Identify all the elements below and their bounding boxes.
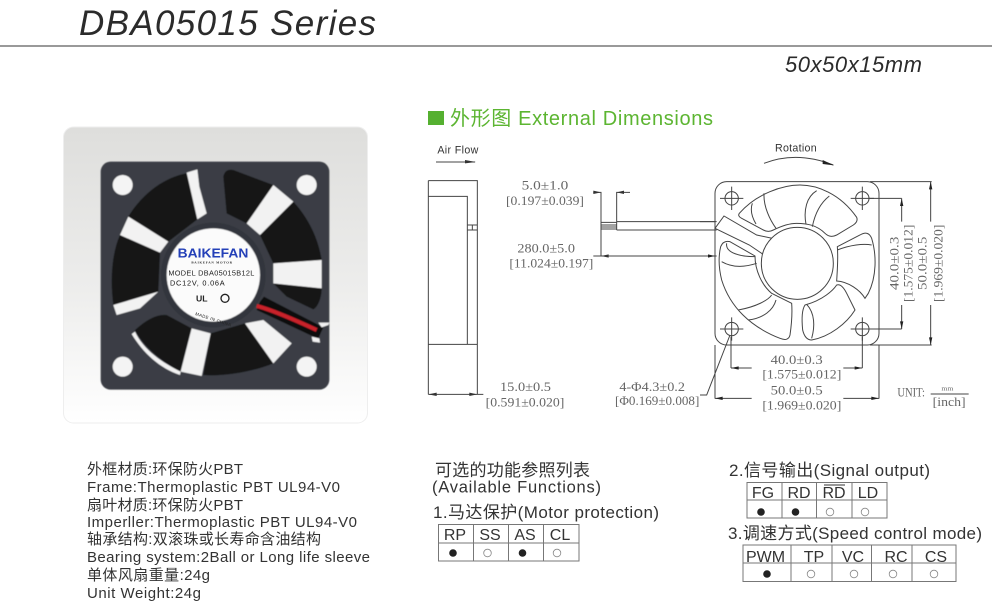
dimension lines [868, 182, 932, 345]
table: motor protection: RP [444, 527, 466, 544]
drawing: front view [700, 143, 969, 412]
unit legend: mm [941, 386, 954, 393]
size label: 50x50x15mm [785, 52, 922, 77]
drawing: front view: [1.575±0.012] [762, 368, 841, 382]
fan product image [101, 162, 329, 390]
rotated dimensions: 40.0±0.3 [887, 237, 901, 290]
drawing: side view and wire dimensions: 15.0±0.5 [500, 380, 551, 394]
specifications text block: Frame:Thermoplastic PBT UL94-V0 [87, 479, 340, 496]
specifications text block: 扇叶材质:环保防火PBT [87, 497, 243, 514]
unit legend: UNIT: [897, 386, 925, 400]
motor protection heading: 1.马达保护(Motor protection) [433, 503, 659, 522]
specifications text block: Bearing system:2Ball or Long life sleeve [87, 549, 370, 566]
speed control heading: 3.调速方式(Speed control mode) [728, 524, 982, 543]
table: motor protection [438, 524, 579, 561]
hub label: BAIKEFAN [178, 247, 248, 261]
hub label: UL [196, 294, 208, 304]
panel: fan photo [64, 127, 368, 423]
available functions heading: 可选的功能参照列表 [435, 461, 590, 480]
table: speed control [743, 545, 956, 582]
table: speed control: TP [804, 549, 824, 566]
drawing: side view and wire dimensions: 280.0±5.0 [517, 241, 575, 255]
air flow label: Air Flow [437, 144, 479, 156]
specifications text block: Unit Weight:24g [87, 585, 201, 602]
table: signal output: FG [752, 485, 774, 502]
hub label: BAIKEFAN MOTOR [191, 261, 233, 265]
dimension text: 5.0±1.0 [522, 178, 568, 192]
wire [601, 222, 717, 230]
table: signal output: RD [822, 485, 846, 502]
drawing: front view: 50.0±0.5 [916, 237, 930, 290]
title: DBA05015 Series [79, 4, 376, 43]
table: motor protection: CL [550, 527, 570, 544]
table: motor protection: AS [514, 527, 536, 544]
drawing: side view and wire dimensions: [0.591±0.020] [486, 396, 564, 410]
table: speed control: CS [925, 549, 947, 566]
table: speed control: RC [884, 549, 908, 566]
hub label: MODEL DBA05015B12L [168, 269, 254, 278]
hub label: DC12V, 0.06A [170, 279, 225, 288]
specifications text block: 外框材质:环保防火PBT [87, 461, 243, 478]
hub label [168, 247, 254, 328]
white gaps between blades [113, 169, 322, 376]
table: signal output: LD [858, 485, 878, 502]
drawing: front view: [1.575±0.012] [901, 225, 915, 302]
wires [257, 297, 329, 343]
fan hub [161, 223, 266, 327]
side view outline [428, 181, 477, 394]
drawing: front view: [1.969±0.020] [762, 398, 841, 412]
frame [715, 182, 879, 345]
specifications text block: 轴承结构:双滚珠或长寿命含油结构 [87, 530, 321, 548]
blade windows [739, 185, 857, 236]
specifications text block: 单体风扇重量:24g [87, 567, 210, 584]
wire holder [715, 216, 780, 261]
drawing: side view and wire dimensions: 4-Φ4.3±0.2 [619, 380, 685, 394]
drawing: front view: [1.969±0.020] [931, 225, 945, 302]
hub label: MADE IN CHINA [195, 311, 232, 328]
drawing: side view and wire dimensions: [0.197±0.039] [506, 194, 584, 208]
heading: external dimensions: 外形图 External Dimensions [450, 107, 713, 130]
specifications text block [87, 461, 370, 602]
drawing: side view and wire dimensions: [11.024±0.197] [509, 256, 593, 270]
signal output heading: 2.信号输出(Signal output) [729, 461, 930, 480]
available functions heading [432, 461, 601, 496]
unit legend [897, 386, 969, 409]
specifications text block: Imperller:Thermoplastic PBT UL94-V0 [87, 514, 357, 531]
table: motor protection: SS [479, 527, 501, 544]
hub [761, 227, 833, 299]
drawing: side view and wire dimensions: [Φ0.169±0.008] [615, 394, 699, 408]
available functions heading: (Available Functions) [432, 478, 601, 496]
drawing: side view and wire dimensions [428, 144, 717, 410]
table: signal output [747, 482, 887, 518]
mounting holes [720, 187, 874, 341]
drawing: front view: 50.0±0.5 [771, 384, 823, 398]
table: signal output: RD [787, 485, 811, 502]
drawing: front view: 40.0±0.3 [771, 353, 823, 367]
table: speed control: VC [842, 549, 864, 566]
unit legend: [inch] [933, 395, 966, 409]
table: speed control: PWM [746, 549, 785, 566]
rotation label and arrow: Rotation [775, 143, 817, 155]
